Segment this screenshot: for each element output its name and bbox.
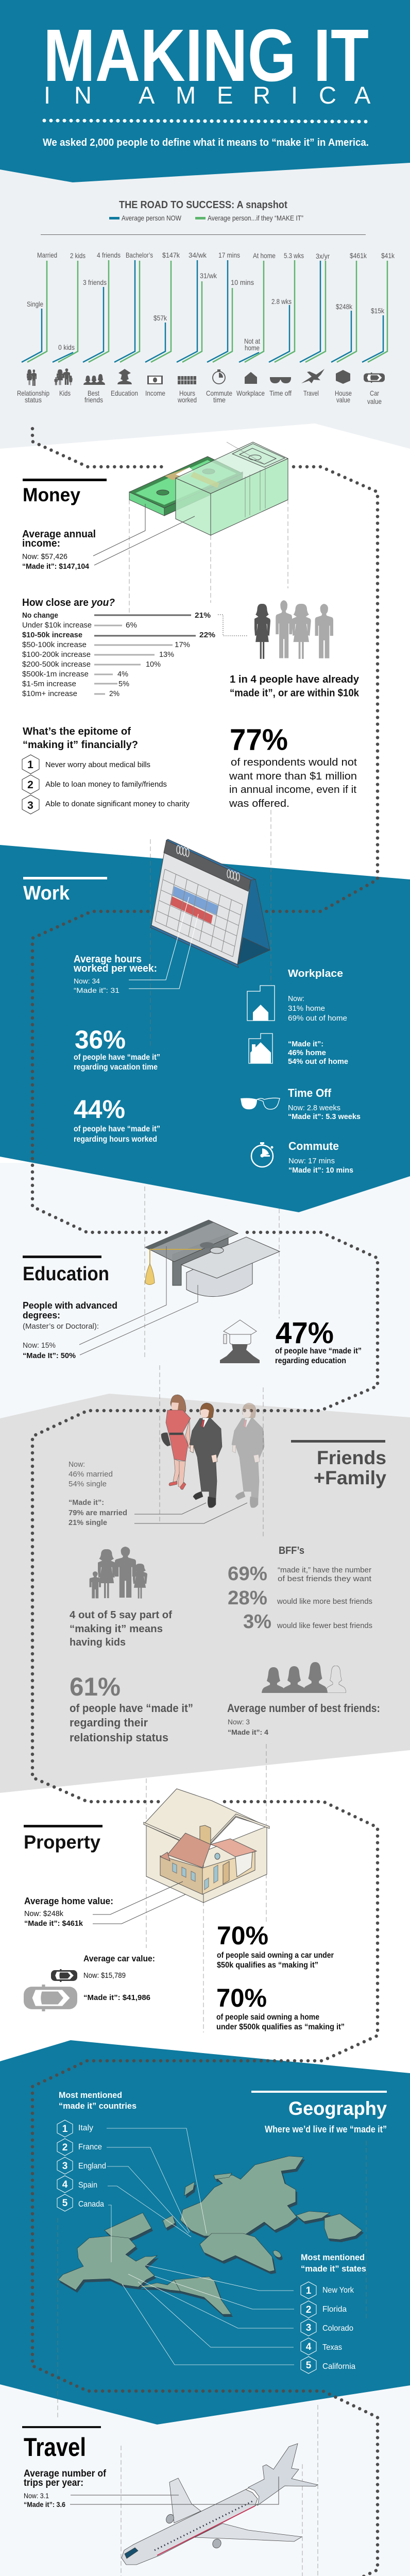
workplace now text: 69% out of home bbox=[288, 1014, 347, 1023]
stat: 70% car: $50k qualifies as “making it” bbox=[217, 1961, 318, 1970]
heading: travel: Travel bbox=[24, 2433, 86, 2462]
icon: family bbox=[54, 368, 73, 385]
chart value labels: At home bbox=[253, 251, 276, 260]
stat: 61%: 61% bbox=[70, 1672, 121, 1701]
commute block: “Made it”: 10 mins bbox=[288, 1166, 353, 1175]
illustration: airplane bbox=[122, 2444, 318, 2565]
chart value labels: 31/wk bbox=[200, 272, 217, 280]
list: made it countries: 2 bbox=[62, 2142, 67, 2153]
commute block: Commute bbox=[288, 1140, 339, 1153]
time off block: “Made it”: 5.3 weeks bbox=[288, 1113, 361, 1121]
time off block: Time Off bbox=[288, 1087, 332, 1099]
hours worked text: “Made it”: 31 bbox=[74, 986, 119, 994]
stat: 44%: of people have “made it” bbox=[74, 1125, 160, 1133]
bar chart: how close: 21% bbox=[195, 612, 211, 620]
stat: 36%: of people have “made it” bbox=[74, 1053, 160, 1062]
stat: 44%: 44% bbox=[74, 1095, 125, 1124]
time off block: Now: 2.8 weeks bbox=[288, 1104, 340, 1112]
icon: plane bbox=[301, 369, 324, 383]
illustration: graduation cap bbox=[79, 1220, 280, 1355]
icon: small dark car bbox=[51, 1969, 77, 1982]
bar chart: how close: 10% bbox=[146, 660, 161, 669]
stat: 47%: regarding education bbox=[275, 1357, 346, 1365]
heading: property: Property bbox=[24, 1832, 100, 1853]
chart category labels: time bbox=[213, 396, 226, 404]
bar chart: how close: $100-200k increase bbox=[22, 651, 91, 659]
hours worked text: worked per week: bbox=[73, 963, 157, 974]
list: made it states: Florida bbox=[322, 2305, 347, 2314]
BFFs block: of best friends they want bbox=[278, 1574, 372, 1583]
bar chart: how close: $10m+ increase bbox=[22, 690, 77, 698]
stat: 61% bbox=[70, 1672, 193, 1744]
list: made it states: “made it” states bbox=[301, 2264, 366, 2274]
stat: 77%: in annual income, even if it bbox=[229, 784, 356, 795]
callout: 1 in 4 bbox=[230, 674, 360, 699]
chart value labels: home bbox=[245, 344, 260, 352]
advanced degrees text: People with advanced bbox=[23, 1300, 117, 1311]
icon: bill bbox=[147, 376, 163, 384]
time off block bbox=[288, 1087, 361, 1121]
ranked list: epitome: 1 bbox=[27, 759, 33, 771]
ranked list: epitome: 3 bbox=[27, 800, 33, 811]
chart value labels: 0 kids bbox=[58, 343, 75, 351]
list: made it countries: France bbox=[78, 2143, 102, 2151]
BFFs block: BFF’s bbox=[279, 1545, 304, 1556]
chart value labels: 2 kids bbox=[70, 251, 86, 260]
home value text: “Made it”: $461k bbox=[24, 1920, 83, 1928]
bar chart: how close: 4% bbox=[117, 670, 128, 679]
chart category labels bbox=[17, 389, 382, 405]
workplace made it text bbox=[288, 1040, 348, 1066]
average income text: Average annual bbox=[22, 529, 96, 540]
BFFs block: “made it,” have the number bbox=[278, 1566, 371, 1574]
background: header bbox=[0, 0, 410, 182]
bar chart: how close: 5% bbox=[118, 680, 129, 688]
chart value labels: $147k bbox=[162, 251, 180, 259]
chart legend: Average person NOW bbox=[122, 214, 182, 222]
relationship status text: 21% single bbox=[69, 1519, 107, 1527]
icon: sunglasses bbox=[270, 377, 291, 383]
bar chart: how close: No change bbox=[22, 612, 58, 620]
connector dots to people bbox=[218, 615, 247, 636]
car value block: Average car value: bbox=[83, 1954, 155, 1963]
stat: 77% bbox=[229, 723, 357, 809]
chart category labels: Car bbox=[370, 389, 379, 397]
stat: 61%: regarding their bbox=[70, 1716, 148, 1729]
chart legend bbox=[109, 214, 303, 222]
chart legend: Average person...if they “MAKE IT” bbox=[208, 214, 303, 222]
chart category labels: Workplace bbox=[236, 389, 265, 397]
bar chart: how close: 13% bbox=[159, 651, 174, 659]
heading: epitome of making it: “making it” financially? bbox=[23, 739, 138, 751]
BFFs block: 3% bbox=[243, 1611, 271, 1633]
home value text: Average home value: bbox=[24, 1896, 113, 1906]
chart value labels: 34/wk bbox=[189, 251, 207, 259]
trips per year text: Average number of bbox=[24, 2468, 107, 2479]
average income text: “Made it”: $147,104 bbox=[22, 562, 90, 571]
bar chart: how close: 2% bbox=[109, 690, 119, 698]
list: made it states: 1 bbox=[306, 2285, 312, 2296]
car value block: “Made it”: $41,986 bbox=[83, 1993, 150, 2002]
chart value labels: 3x/yr bbox=[316, 252, 330, 260]
stat: 36%: 36% bbox=[75, 1025, 126, 1054]
panel: work bbox=[23, 877, 361, 1175]
relationship status text: 46% married bbox=[69, 1470, 113, 1479]
heading: road to success: THE ROAD TO SUCCESS: A snapshot bbox=[119, 199, 287, 211]
chart value labels: Bachelor’s bbox=[126, 251, 153, 259]
list: made it countries: Canada bbox=[78, 2200, 104, 2209]
average number of best friends: Average number of best friends: bbox=[227, 1702, 380, 1715]
chart category labels: Income bbox=[145, 389, 165, 397]
icon: best friends bbox=[83, 374, 105, 385]
hours worked text bbox=[73, 954, 157, 994]
heading: friends + family: Friends bbox=[317, 1447, 386, 1468]
stat: 47% bbox=[275, 1316, 362, 1365]
illustration: house in house bbox=[93, 1789, 269, 1924]
average income text bbox=[22, 529, 96, 571]
heading: education: Education bbox=[23, 1263, 109, 1285]
list: made it states: 3 bbox=[306, 2323, 311, 2333]
average number of best friends: “Made it”: 4 bbox=[228, 1728, 268, 1736]
icon: large gray car bbox=[24, 1985, 77, 2011]
car value block: Now: $15,789 bbox=[83, 1971, 126, 1980]
icon: family silhouette bbox=[90, 1547, 147, 1599]
workplace now text: 31% home bbox=[288, 1005, 325, 1013]
ghost man bbox=[232, 1403, 264, 1507]
BFFs block: would like more best friends bbox=[277, 1597, 372, 1606]
ranked list: epitome: 2 bbox=[27, 779, 33, 791]
panel: travel bbox=[22, 2426, 279, 2509]
stat: 36% bbox=[74, 1025, 160, 1072]
heading: epitome of making it: What’s the epitome of bbox=[23, 726, 131, 737]
workplace now text: Now: bbox=[288, 995, 304, 1003]
average number of best friends bbox=[227, 1702, 380, 1736]
bar chart: how close: 17% bbox=[175, 641, 190, 649]
stat: 77%: of respondents would not bbox=[231, 757, 357, 768]
subtitle: We asked 2,000 people to define what it means to “make it” in America. bbox=[43, 137, 369, 148]
icon: stopwatch bbox=[251, 1142, 273, 1167]
stat: 70% home: of people said owning a home bbox=[216, 2013, 319, 2022]
callout: 1 in 4: “made it”, or are within $10k bbox=[230, 687, 360, 699]
bar chart: how close: Under $10k increase bbox=[22, 621, 92, 630]
leader lines hours bbox=[129, 897, 198, 989]
commute block: Now: 17 mins bbox=[288, 1157, 335, 1165]
icon: home in building, now bbox=[247, 986, 275, 1021]
average number of best friends: Now: 3 bbox=[228, 1718, 250, 1726]
list: made it states: 5 bbox=[306, 2360, 312, 2371]
car value block bbox=[24, 1954, 155, 2011]
background: friends and family section bbox=[0, 1394, 410, 1793]
chart value labels: 17 mins bbox=[218, 251, 240, 259]
icon: calendar grid bbox=[178, 376, 196, 384]
panel: money bbox=[22, 479, 360, 814]
relationship status text bbox=[69, 1461, 127, 1527]
chart: road to success line columns bbox=[22, 260, 387, 362]
panel: geography bbox=[57, 2090, 387, 2374]
chart category labels: value bbox=[367, 397, 382, 405]
chart category labels: House bbox=[335, 389, 352, 397]
panel: property bbox=[24, 1825, 345, 2031]
chart value labels: 4 friends bbox=[97, 251, 121, 259]
chart value labels: $57k bbox=[153, 314, 167, 322]
stat: 47%: of people have “made it” bbox=[275, 1347, 362, 1355]
list: made it countries: 3 bbox=[62, 2161, 67, 2172]
chart value labels: 10 mins bbox=[231, 278, 254, 286]
stat: 70% home: 70% bbox=[216, 1984, 267, 2012]
list: made it states: California bbox=[322, 2362, 355, 2371]
stat: 77%: 77% bbox=[230, 723, 288, 756]
callout: 1 in 4: 1 in 4 people have already bbox=[230, 674, 360, 685]
bar chart: how close: $500k-1m increase bbox=[22, 670, 89, 679]
chart category labels: Kids bbox=[59, 389, 71, 397]
stat: 61%: relationship status bbox=[70, 1731, 168, 1744]
BFFs block bbox=[228, 1545, 372, 1633]
guide dashed lines bbox=[46, 500, 366, 2576]
illustration: money stacks bbox=[93, 442, 288, 565]
bar chart: how close: $50-100k increase bbox=[22, 641, 87, 649]
list: made it countries: “made it” countries bbox=[59, 2101, 136, 2111]
BFFs block: 69% bbox=[228, 1563, 267, 1585]
illustration: world map bbox=[58, 2156, 364, 2317]
workplace made it text: “Made it”: bbox=[288, 1040, 323, 1048]
icon: couple bbox=[27, 369, 37, 386]
list: made it states: New York bbox=[322, 2286, 354, 2295]
icon: graduate bbox=[117, 369, 132, 384]
advanced degrees text: (Master’s or Doctoral): bbox=[23, 1322, 99, 1331]
panel: education bbox=[23, 1256, 362, 1365]
heading: geography: Geography bbox=[288, 2098, 387, 2119]
4 out of 5 text: “making it” means bbox=[70, 1623, 163, 1635]
background: travel section bbox=[0, 2380, 410, 2576]
panel: friends and family bbox=[69, 1440, 386, 1744]
ranked list: epitome: Able to donate significant money to charity bbox=[45, 800, 190, 808]
BFFs block: would like fewer best friends bbox=[277, 1621, 372, 1630]
chart value labels: Single bbox=[27, 300, 43, 308]
advanced degrees text: “Made It”: 50% bbox=[23, 1352, 76, 1360]
bar chart: how close: $10-50k increase bbox=[22, 631, 82, 639]
background: road section bbox=[0, 155, 410, 449]
list: made it countries: Italy bbox=[78, 2124, 93, 2132]
icon: car bbox=[364, 372, 385, 383]
chart category labels: Hours bbox=[179, 389, 195, 397]
chart value labels: $41k bbox=[381, 251, 395, 260]
chart category labels: Relationship bbox=[17, 389, 49, 397]
illustration: calendar bbox=[150, 839, 270, 968]
chart value labels bbox=[27, 251, 395, 352]
relationship status text: 79% are married bbox=[69, 1509, 127, 1517]
ranked list: epitome: Never worry about medical bills bbox=[45, 760, 150, 769]
relationship status text: Now: bbox=[69, 1461, 85, 1469]
chart value labels: $461k bbox=[350, 251, 367, 260]
stat: 44% bbox=[74, 1095, 160, 1144]
background: education section bbox=[0, 1163, 410, 1426]
4 out of 5 text: 4 out of 5 say part of bbox=[70, 1609, 172, 1621]
list: made it states: Colorado bbox=[322, 2324, 353, 2333]
list: made it countries bbox=[57, 2090, 207, 2262]
list: made it states: 2 bbox=[306, 2304, 311, 2315]
bar chart: how close: $1-5m increase bbox=[22, 680, 76, 688]
trips per year text: “Made it”: 3.6 bbox=[24, 2500, 65, 2509]
stat: 70% home: under $500k qualifies as “making it” bbox=[216, 2023, 345, 2031]
heading: geography: Where we’d live if we “made it” bbox=[265, 2124, 387, 2134]
man in dark suit bbox=[190, 1403, 222, 1507]
heading: friends + family bbox=[291, 1440, 386, 1488]
list: made it states: Texas bbox=[322, 2343, 342, 2352]
relationship status text: 54% single bbox=[69, 1480, 107, 1488]
chart category labels: Time off bbox=[269, 389, 292, 397]
heading: work: Work bbox=[23, 883, 70, 904]
home value text bbox=[24, 1896, 113, 1928]
background: work section bbox=[0, 845, 410, 1212]
average income text: Now: $57,426 bbox=[22, 552, 67, 561]
background: geography section bbox=[0, 2040, 410, 2425]
average income text: income: bbox=[22, 538, 60, 549]
icon: graduate head bbox=[220, 1320, 260, 1363]
list: made it states bbox=[122, 2252, 366, 2374]
heading: how close are you: How close are you? bbox=[22, 597, 115, 608]
BFFs block: 28% bbox=[228, 1587, 267, 1609]
bar chart: how close: 6% bbox=[126, 621, 137, 630]
home value text: Now: $248k bbox=[24, 1910, 64, 1918]
chart category labels: worked bbox=[177, 396, 197, 404]
heading: money bbox=[23, 479, 107, 505]
bar chart: how close: 22% bbox=[199, 631, 215, 639]
icon: stopwatch bbox=[213, 369, 225, 384]
stat: 70% car: of people said owning a car under bbox=[217, 1951, 334, 1960]
icon: house bbox=[245, 372, 257, 384]
chart value labels: Married bbox=[37, 251, 57, 259]
advanced degrees text bbox=[23, 1300, 117, 1360]
icon: hexagon house value bbox=[336, 370, 350, 384]
stat: 77%: was offered. bbox=[229, 798, 289, 809]
trips per year text: Now: 3.1 bbox=[24, 2492, 49, 2500]
4 out of 5 text: having kids bbox=[70, 1637, 126, 1648]
chart value labels: 5.3 wks bbox=[284, 251, 304, 260]
workplace now text bbox=[288, 995, 347, 1023]
stat: 70% home bbox=[216, 1984, 345, 2031]
stat: 44%: regarding hours worked bbox=[74, 1135, 157, 1144]
title: IN AMERICA bbox=[44, 81, 371, 109]
heading: education bbox=[23, 1256, 109, 1285]
list: made it states: Most mentioned bbox=[301, 2252, 365, 2262]
chart category icons bbox=[27, 368, 385, 386]
leader lines trips bbox=[70, 2477, 279, 2504]
stat: 70% car: 70% bbox=[217, 1921, 268, 1950]
chart value labels: $15k bbox=[371, 307, 385, 315]
chart category labels: status bbox=[25, 396, 42, 404]
chart value labels: 2.8 wks bbox=[271, 297, 292, 306]
list: made it countries: England bbox=[78, 2162, 106, 2171]
heading: epitome of making it bbox=[23, 726, 138, 751]
advanced degrees text: degrees: bbox=[23, 1310, 60, 1320]
dotted divider bbox=[44, 121, 367, 122]
icon: home in building, made it bbox=[249, 1033, 272, 1063]
list: made it countries: 5 bbox=[62, 2198, 68, 2209]
workplace made it text: 46% home bbox=[288, 1049, 326, 1057]
chart category labels: Commute bbox=[206, 389, 232, 397]
commute block bbox=[288, 1140, 353, 1175]
hours worked text: Now: 34 bbox=[74, 977, 100, 985]
list: made it countries: Most mentioned bbox=[59, 2090, 122, 2100]
heading: workplace: Workplace bbox=[288, 968, 343, 979]
chart category labels: Travel bbox=[303, 389, 319, 397]
chart category labels: friends bbox=[84, 396, 103, 404]
ranked list: epitome bbox=[22, 755, 190, 814]
advanced degrees text: Now: 15% bbox=[23, 1342, 56, 1350]
icon: business people bbox=[254, 600, 333, 659]
illustration: couple and ghost man bbox=[161, 1395, 264, 1507]
trips per year text: trips per year: bbox=[24, 2478, 83, 2488]
relationship status text: “Made it”: bbox=[69, 1499, 104, 1507]
chart value labels: Not at bbox=[244, 337, 260, 345]
stat: 70% car bbox=[217, 1921, 334, 1970]
stat: 47%: 47% bbox=[276, 1316, 334, 1350]
chart category labels: value bbox=[336, 396, 350, 404]
chart category labels: Education bbox=[111, 389, 138, 397]
icon: half-filled glasses bbox=[241, 1098, 280, 1109]
chart value labels: 3 friends bbox=[83, 278, 107, 286]
hours worked text: Average hours bbox=[74, 954, 142, 965]
trips per year text bbox=[24, 2468, 107, 2509]
chart value labels: $248k bbox=[336, 302, 353, 311]
chart category labels: Best bbox=[88, 389, 99, 397]
dotted journey path bbox=[32, 429, 378, 2576]
heading: money: Money bbox=[23, 484, 80, 505]
bar chart: how close: $200-500k increase bbox=[22, 660, 91, 669]
list: made it countries: 4 bbox=[62, 2179, 68, 2190]
ranked list: epitome: Able to loan money to family/friends bbox=[45, 780, 167, 789]
icon: best friends bbox=[262, 1662, 346, 1693]
stat: 36%: regarding vacation time bbox=[74, 1063, 158, 1072]
heading: geography bbox=[251, 2091, 387, 2134]
4 out of 5 text bbox=[70, 1609, 172, 1648]
stat: 77%: want more than $1 million bbox=[229, 771, 357, 782]
heading: friends + family: +Family bbox=[314, 1467, 386, 1488]
list: made it states: 4 bbox=[306, 2342, 312, 2352]
heading: work bbox=[23, 877, 107, 904]
list: made it countries: Spain bbox=[78, 2181, 97, 2190]
workplace made it text: 54% out of home bbox=[288, 1058, 348, 1066]
stat: 61%: of people have “made it” bbox=[70, 1702, 193, 1715]
woman in red dress bbox=[161, 1395, 192, 1489]
bar chart: how close bbox=[22, 612, 215, 698]
list: made it countries: 1 bbox=[62, 2124, 68, 2134]
